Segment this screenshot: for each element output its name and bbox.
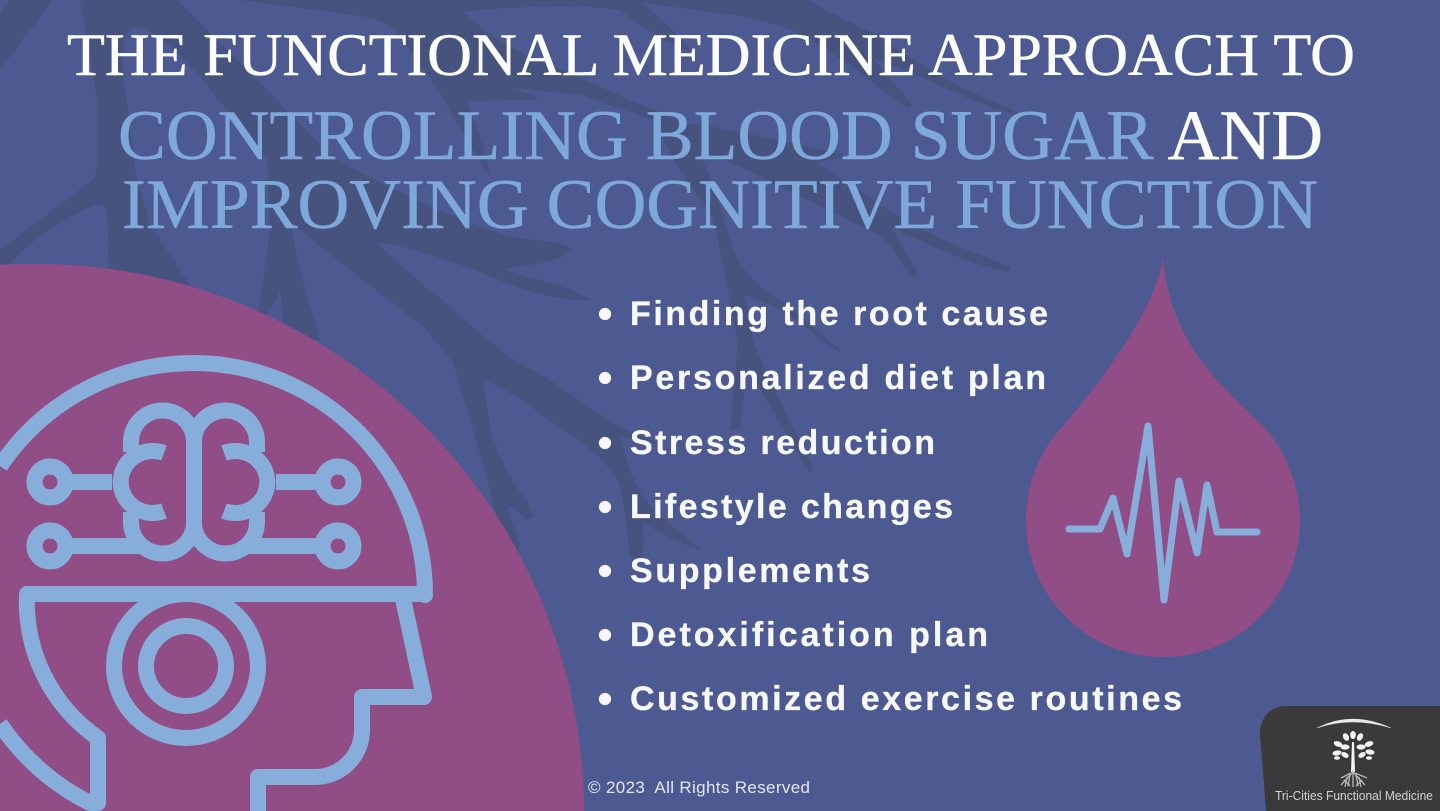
bullet: diet plan: Personalized diet plan — [630, 359, 1046, 397]
icon: heartbeat line — [1069, 426, 1257, 600]
head outline — [0, 363, 425, 803]
bullet: detoxification: Detoxification plan — [630, 616, 988, 654]
icon: head with brain circuit — [0, 363, 425, 811]
copyright: © 2023 All Rights Reserved — [588, 778, 810, 797]
face profile — [258, 594, 424, 811]
title line 1: THE FUNCTIONAL MEDICINE APPROACH TO — [67, 22, 1355, 88]
bullet: exercise: Customized exercise routines — [630, 680, 1182, 718]
title line 3: IMPROVING COGNITIVE FUNCTION — [122, 166, 1318, 244]
title line 2: CONTROLLING BLOOD SUGAR AND — [118, 97, 1323, 175]
neck circle outer — [114, 594, 258, 738]
panel: purple circle — [0, 264, 584, 811]
bullet list — [599, 295, 1182, 718]
circuit nodes — [34, 466, 354, 562]
logo badge — [1260, 706, 1440, 811]
bullet: lifestyle changes: Lifestyle changes — [630, 488, 953, 526]
background: tree roots — [0, 0, 1018, 570]
logo roots — [1341, 770, 1367, 787]
logo tree — [1332, 731, 1375, 772]
brain — [121, 411, 267, 554]
neck circle inner — [146, 626, 226, 706]
bullet: root cause: Finding the root cause — [630, 295, 1048, 333]
title — [67, 22, 1355, 244]
icon: blood drop — [1026, 257, 1300, 657]
logo arc — [1317, 719, 1391, 728]
bullet: stress reduction: Stress reduction — [630, 424, 935, 462]
logo text: Tri-Cities Functional Medicine — [1275, 789, 1433, 803]
bullet: supplements: Supplements — [630, 552, 870, 590]
